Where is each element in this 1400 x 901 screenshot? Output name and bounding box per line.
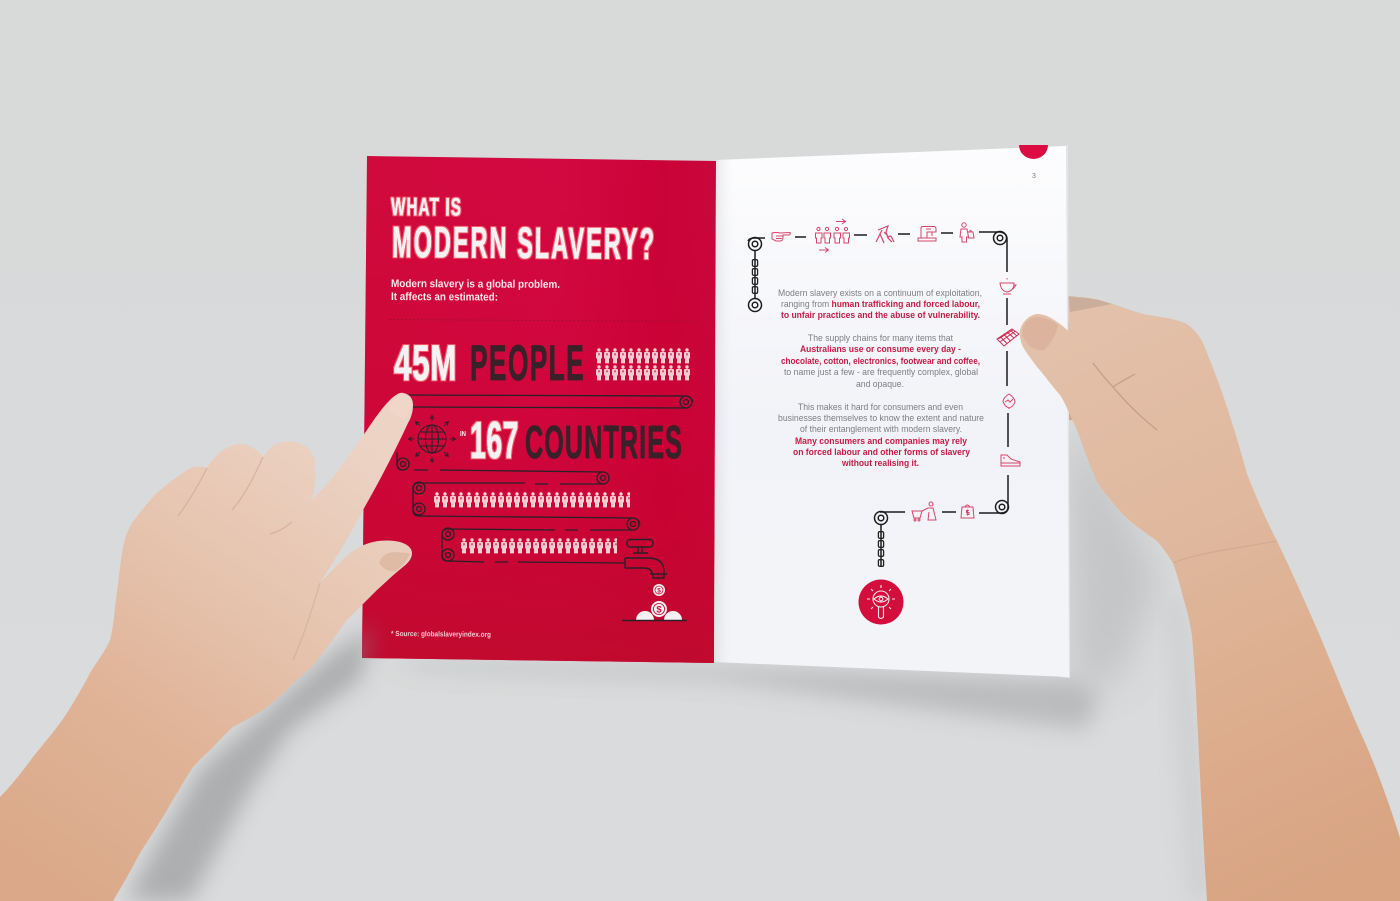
arm and palm (1020, 297, 1400, 901)
top shade of fingers (1069, 297, 1112, 312)
tab: red half circle (1019, 145, 1048, 159)
body text: to unfair practices and the abuse of vulnerability. (781, 310, 980, 320)
icon: coffee cup (1000, 278, 1016, 294)
icons: supply chain stages (772, 219, 1020, 521)
right hand (1020, 297, 1400, 901)
hand creases (1093, 363, 1157, 430)
right arm shadow (1170, 600, 1210, 901)
intro text: Modern slavery is a global problem. (391, 278, 560, 291)
stat: in 167 countries: IN (460, 429, 466, 438)
page number: 3 (1032, 173, 1036, 180)
icon: magnifying glass in red circle (858, 580, 904, 624)
source note: * Source: globalslaveryindex.org (391, 629, 491, 639)
intro text (391, 278, 560, 304)
body text: on forced labour and other forms of slavery (793, 447, 971, 457)
left hand shadow (125, 625, 375, 901)
stat: in 167 countries (460, 412, 683, 470)
body text: Many consumers and companies may rely (795, 436, 968, 446)
arm and palm (0, 393, 413, 901)
body text: chocolate, cotton, electronics, footwear and coffee, (781, 356, 980, 366)
body text: The supply chains for many items that (808, 333, 953, 343)
page edge (1060, 145, 1070, 678)
panel: left red page (362, 156, 717, 663)
fingernails (388, 395, 411, 418)
icon: pointing hand (772, 232, 790, 241)
icon: globe with arrows (409, 416, 455, 462)
right page side shadow (1069, 420, 1160, 690)
stat: in 167 countries: 167 (470, 412, 519, 470)
finger creases and shading (178, 457, 292, 534)
left hand (0, 393, 413, 901)
heading (391, 193, 656, 269)
conveyor belts (396, 395, 693, 563)
body text: to name just a few - are frequently complex, global (784, 367, 978, 377)
icon: coins (622, 584, 687, 620)
body text: Modern slavery exists on a continuum of exploitation, (778, 288, 982, 298)
icon: shopper with cart (912, 502, 936, 521)
body text: This makes it hard for consumers and even (798, 402, 963, 412)
panel: right white page (714, 145, 1070, 678)
body text: businesses themselves to know the extent and nature (778, 413, 984, 423)
stat: 45M people: 45M (394, 335, 457, 391)
stat: 45M people: PEOPLE (470, 335, 585, 391)
body text (778, 288, 984, 468)
body text: without realising it. (841, 458, 919, 468)
heading: MODERN SLAVERY? (392, 218, 656, 269)
icon: sneaker (1001, 455, 1020, 466)
icon: shopping bag (961, 505, 974, 518)
right hand fingers behind page (1060, 296, 1130, 420)
heading: WHAT IS (391, 193, 462, 221)
icon: woman with bag (960, 223, 974, 242)
body text: Australians use or consume every day - (800, 344, 961, 354)
icon: chocolate bar (997, 329, 1019, 346)
body text: ranging from human trafficking and forced labour, (781, 299, 980, 309)
icon: coins: $ (657, 588, 661, 594)
thumbnail (1022, 317, 1058, 350)
supply chain track (748, 232, 1008, 566)
icon: labourer digging (876, 226, 894, 243)
icon: tap (625, 540, 667, 578)
icon: coins: $ (656, 604, 662, 616)
brochure shadow (380, 662, 1100, 730)
icon: trafficked people and arrows (816, 219, 850, 252)
intro text: It affects an estimated: (391, 291, 498, 304)
icon: cotton boll (1003, 394, 1015, 409)
icon: sewing machine (918, 226, 936, 241)
people rows on belts (433, 492, 630, 554)
red page background (362, 156, 717, 663)
body text: of their entanglement with modern slavery. (800, 424, 962, 434)
stat: in 167 countries: COUNTRIES (525, 416, 683, 468)
body text: and opaque. (856, 379, 904, 389)
